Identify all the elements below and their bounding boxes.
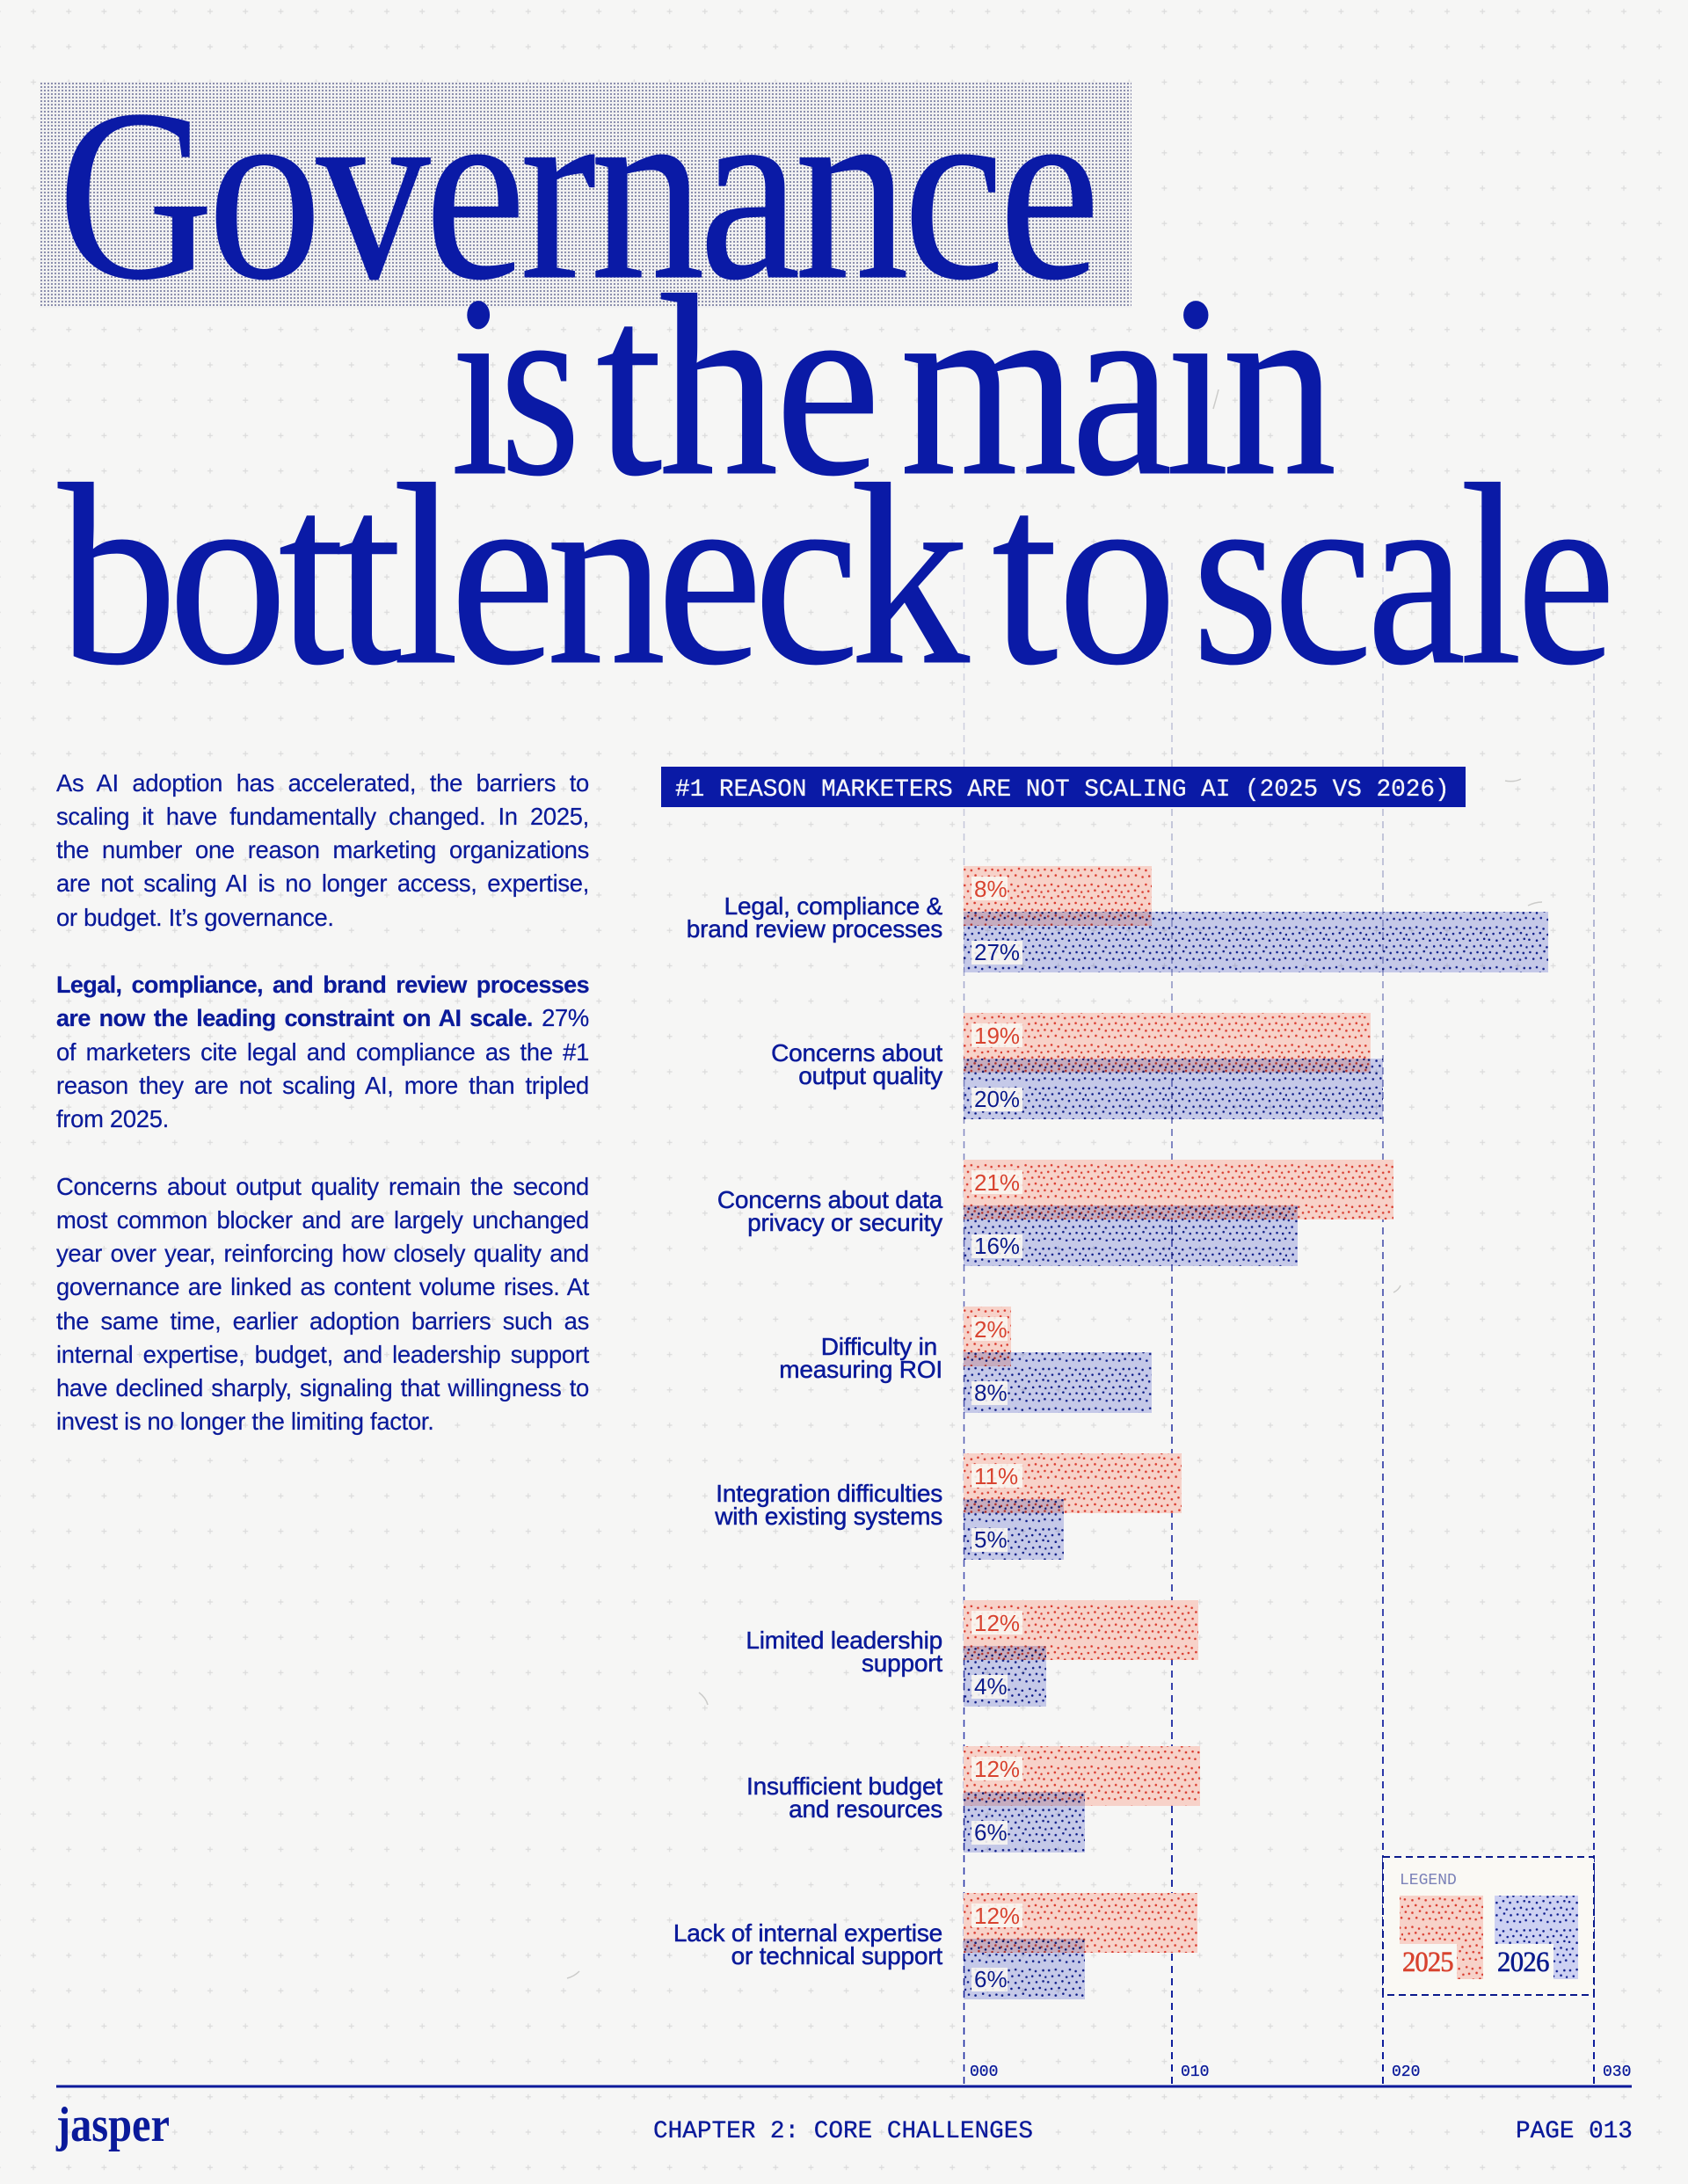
axis labels: 010 xyxy=(1181,2064,1209,2081)
footer: page number: PAGE 013 xyxy=(1516,2118,1633,2145)
legend: LEGEND xyxy=(1400,1872,1457,1889)
axis labels: 020 xyxy=(1392,2064,1420,2081)
paragraph: output quality: year over year, reinforcing how closely quality and xyxy=(56,1240,589,1267)
paragraph: intro: the number one reason marketing organizations xyxy=(56,836,589,863)
paragraph: legal and compliance: are now the leading constraint on AI scale. 27% xyxy=(56,1004,589,1031)
bar chart xyxy=(673,866,1548,1999)
title: Governance xyxy=(58,47,1100,334)
paragraph: legal and compliance: from 2025. xyxy=(56,1105,169,1132)
row: legal, compliance and brand review: Legal, compliance & xyxy=(724,892,943,920)
row: measuring ROI: 2% xyxy=(974,1316,1008,1343)
row: leadership support xyxy=(746,1600,1198,1707)
title: is xyxy=(451,242,580,529)
row: data privacy or security: Concerns about data xyxy=(717,1186,943,1213)
row: legal, compliance and brand review: 8% xyxy=(974,876,1008,902)
row: data privacy or security: privacy or security xyxy=(747,1209,942,1236)
title highlight: dotted block behind Governance xyxy=(40,82,1131,308)
legend swatch: 2025: 2025 xyxy=(1402,1946,1454,1977)
paragraph: output quality: governance are linked as content volume rises. At xyxy=(56,1273,589,1300)
row: measuring ROI: measuring ROI xyxy=(779,1356,942,1383)
paragraph: intro: scaling it have fundamentally changed. In 2025, xyxy=(56,803,589,830)
row: output quality: 20% xyxy=(974,1086,1020,1112)
row: leadership support: support xyxy=(862,1649,942,1677)
row: leadership support: 12% xyxy=(974,1610,1020,1636)
paragraph: legal and compliance: of marketers cite legal and compliance as the #1 xyxy=(56,1037,589,1066)
title: bottleneck xyxy=(58,432,970,719)
row: internal expertise: 6% xyxy=(974,1966,1008,1992)
axis labels: 030 xyxy=(1603,2064,1631,2081)
footer: chapter label: CHAPTER 2: CORE CHALLENGES xyxy=(653,2118,1033,2145)
chart header xyxy=(661,767,1466,807)
row: output quality xyxy=(771,1013,1383,1119)
row: measuring ROI: Difficulty in xyxy=(821,1333,937,1360)
row: budget and resources: and resources xyxy=(789,1795,942,1823)
row: integration difficulties xyxy=(714,1453,1182,1560)
title: main xyxy=(900,243,1336,530)
legend swatch: 2026 xyxy=(1495,1896,1578,1979)
title: to xyxy=(992,432,1177,719)
row: integration difficulties: 11% xyxy=(974,1463,1018,1489)
paragraph: legal and compliance: reason they are not scaling AI, more than tripled xyxy=(56,1072,589,1099)
row: budget and resources: 6% xyxy=(974,1819,1008,1845)
paragraph: intro: or budget. It’s governance. xyxy=(56,904,334,930)
legend xyxy=(1383,1857,1594,1995)
row: output quality: Concerns about xyxy=(771,1039,942,1067)
row: data privacy or security: 16% xyxy=(974,1233,1020,1259)
title: the xyxy=(596,243,881,530)
row: internal expertise xyxy=(673,1893,1197,1999)
row: budget and resources xyxy=(746,1746,1200,1853)
legend swatch: 2026: 2026 xyxy=(1497,1946,1550,1977)
row: output quality: output quality xyxy=(798,1062,942,1089)
paragraph: output quality: Concerns about output quality remain the second xyxy=(56,1173,589,1199)
paragraph: legal and compliance: Legal, compliance, and brand review processes xyxy=(56,972,589,998)
paragraph: legal and compliance xyxy=(56,972,589,1132)
row: internal expertise: Lack of internal expertise xyxy=(673,1919,942,1947)
paragraph: intro: As AI adoption has accelerated, the barriers to xyxy=(56,768,589,797)
chart header: #1 REASON MARKETERS ARE NOT SCALING AI (2025 VS 2026) xyxy=(675,776,1450,804)
row: legal, compliance and brand review: brand review processes xyxy=(687,915,942,943)
row: internal expertise: or technical support xyxy=(731,1942,942,1969)
row: integration difficulties: with existing systems xyxy=(714,1503,942,1530)
row: leadership support: Limited leadership xyxy=(746,1627,942,1654)
paragraph: intro: are not scaling AI is no longer access, expertise, xyxy=(56,870,589,897)
row: measuring ROI: 8% xyxy=(974,1380,1008,1406)
axis labels xyxy=(970,2064,1631,2081)
title xyxy=(58,47,1616,719)
paragraph: output quality: internal expertise, budget, and leadership support xyxy=(56,1341,589,1368)
paragraph: output quality: the same time, earlier adoption barriers such as xyxy=(56,1307,589,1335)
title: scale xyxy=(1192,431,1616,718)
paragraph: output quality: invest is no longer the limiting factor. xyxy=(56,1408,434,1435)
paragraph: output quality: have declined sharply, signaling that willingness to xyxy=(56,1374,589,1401)
row: leadership support: 4% xyxy=(974,1673,1008,1700)
paragraph: output quality: most common blocker and are largely unchanged xyxy=(56,1206,589,1234)
row: data privacy or security xyxy=(717,1160,1393,1266)
row: budget and resources: Insufficient budget xyxy=(746,1773,942,1800)
row: output quality: 19% xyxy=(974,1023,1020,1049)
row: data privacy or security: 21% xyxy=(974,1169,1020,1196)
row: budget and resources: 12% xyxy=(974,1756,1020,1782)
row: integration difficulties: Integration difficulties xyxy=(716,1480,942,1507)
row: legal, compliance and brand review: 27% xyxy=(974,939,1020,965)
footer: jasper logo: jasper xyxy=(55,2098,170,2152)
axis labels: 000 xyxy=(970,2064,998,2081)
row: legal, compliance and brand review xyxy=(687,866,1548,972)
row: measuring ROI xyxy=(779,1307,1152,1413)
legend swatch: 2025 xyxy=(1400,1896,1483,1979)
paragraph: output quality xyxy=(56,1173,589,1435)
paragraph: intro xyxy=(56,768,589,932)
row: integration difficulties: 5% xyxy=(974,1526,1008,1553)
footer rule xyxy=(56,2086,1632,2087)
body copy xyxy=(56,768,589,1435)
row: internal expertise: 12% xyxy=(974,1903,1020,1929)
chart axis: dashed gridlines xyxy=(964,563,1594,2086)
